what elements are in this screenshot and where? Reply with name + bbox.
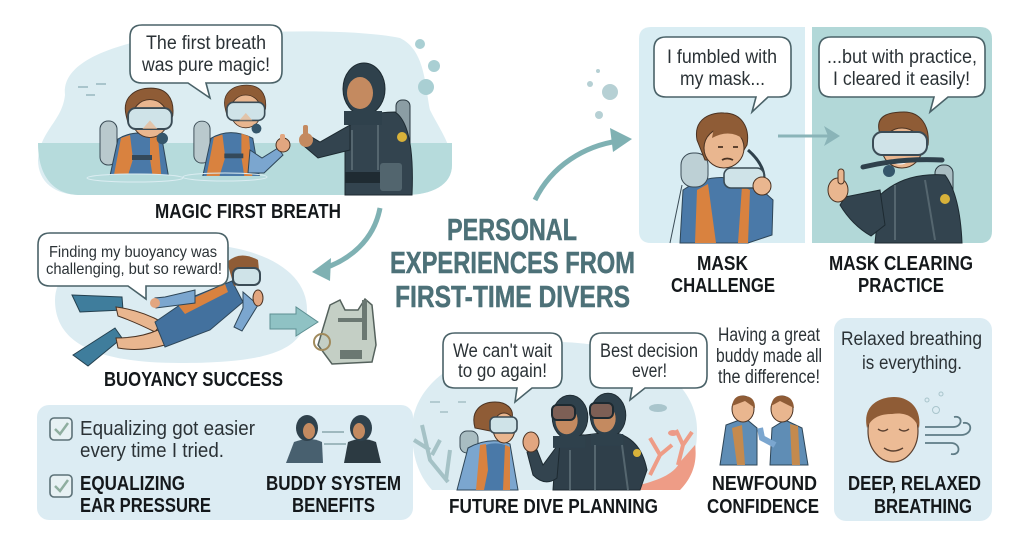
speech bubble 2: ever! (632, 361, 667, 382)
speech bubble (654, 37, 791, 112)
speech bubble: I fumbled with (667, 47, 777, 68)
background blob (412, 342, 697, 490)
speech bubble: challenging, but so reward! (46, 261, 222, 278)
background blob (55, 243, 307, 363)
quote: Having a great (718, 325, 821, 346)
labels: mask panels: CHALLENGE (671, 275, 775, 297)
dark divers (523, 393, 647, 490)
panel: equalizing and buddy system (37, 405, 413, 520)
speech bubble (130, 25, 282, 98)
arrow: to buoyancy (312, 208, 380, 281)
background (37, 405, 413, 520)
panel: magic first breath (38, 25, 452, 223)
quote: Relaxed breathing (841, 329, 982, 350)
seaweed (414, 425, 450, 482)
diver 2 (183, 85, 290, 188)
labels: mask panels: PRACTICE (858, 275, 944, 297)
labels: mask panels (671, 253, 973, 297)
icon: BCD vest (314, 299, 376, 364)
instructor (299, 63, 412, 195)
icon: checkbox 1 (50, 418, 72, 440)
icon: breath (925, 417, 970, 454)
arrow (778, 126, 840, 146)
label: equalizing: EQUALIZING (80, 473, 185, 495)
swimming diver (72, 255, 263, 366)
panel: mask challenge (639, 27, 805, 243)
panel: future dive planning (412, 333, 707, 518)
label: buddy: BUDDY SYSTEM (266, 473, 401, 495)
bubbles (415, 39, 440, 95)
speech bubble 2 (590, 333, 707, 400)
background blob (38, 31, 452, 195)
diver 1 (87, 88, 183, 188)
title: EXPERIENCES FROM (390, 245, 635, 280)
icon: buddies (286, 415, 381, 463)
label: DEEP, RELAXED (848, 473, 981, 495)
quote: is everything. (862, 353, 962, 374)
speech bubble 1 (443, 333, 562, 402)
arrow (270, 307, 318, 336)
speech bubble: was pure magic! (141, 55, 270, 76)
speech bubble (38, 233, 228, 299)
label: buddy (266, 473, 401, 517)
fish (430, 402, 678, 436)
background (834, 318, 992, 521)
label: MAGIC FIRST BREATH (155, 201, 341, 223)
coral (622, 445, 696, 490)
diver (670, 113, 773, 243)
label: BREATHING (874, 496, 972, 518)
text: equalizing quote: every time I tried. (80, 440, 224, 462)
speech bubble: ...but with practice, (827, 47, 977, 68)
arrow: to mask panels (535, 128, 632, 200)
speech bubble 1: We can't wait (453, 341, 553, 362)
label: equalizing (80, 473, 211, 517)
label: NEWFOUND (712, 473, 817, 495)
water band (38, 143, 452, 195)
panel: newfound confidence (707, 325, 822, 518)
background (639, 27, 805, 243)
diver (828, 112, 962, 243)
speech bubble: my mask... (680, 69, 765, 90)
title: FIRST-TIME DIVERS (395, 279, 630, 314)
labels: mask panels: MASK (697, 253, 748, 275)
quote (716, 325, 822, 388)
two buddies (720, 396, 808, 465)
label: buddy: BENEFITS (292, 495, 375, 517)
label: BUOYANCY SUCCESS (104, 369, 283, 391)
speech bubble 2: Best decision (600, 341, 698, 362)
speech bubble: Finding my buoyancy was (49, 244, 217, 261)
panel: mask clearing (778, 27, 992, 243)
title (390, 212, 635, 314)
text: equalizing quote: Equalizing got easier (80, 418, 255, 440)
bubbles near mask panel (587, 69, 618, 119)
quote (841, 329, 982, 374)
label: FUTURE DIVE PLANNING (449, 496, 658, 518)
icon: face (866, 397, 919, 462)
speech bubble: The first breath (146, 33, 266, 54)
bubbles (925, 392, 943, 414)
quote: the difference! (718, 367, 820, 388)
label: equalizing: EAR PRESSURE (80, 495, 211, 517)
label (707, 473, 819, 518)
icon: checkbox 2 (50, 475, 72, 497)
fish marks (78, 84, 106, 95)
quote: buddy made all (716, 346, 822, 367)
panel: buoyancy success (38, 233, 376, 391)
speech bubble: I cleared it easily! (833, 69, 970, 90)
panel: deep relaxed breathing (834, 318, 992, 521)
label (848, 473, 981, 518)
background (812, 27, 992, 243)
title: PERSONAL (447, 212, 577, 247)
kid diver (457, 402, 518, 490)
labels: mask panels: MASK CLEARING (829, 253, 973, 275)
label: CONFIDENCE (707, 496, 819, 518)
text: equalizing quote (80, 418, 255, 462)
speech bubble (819, 37, 985, 112)
speech bubble 1: to go again! (458, 361, 547, 382)
